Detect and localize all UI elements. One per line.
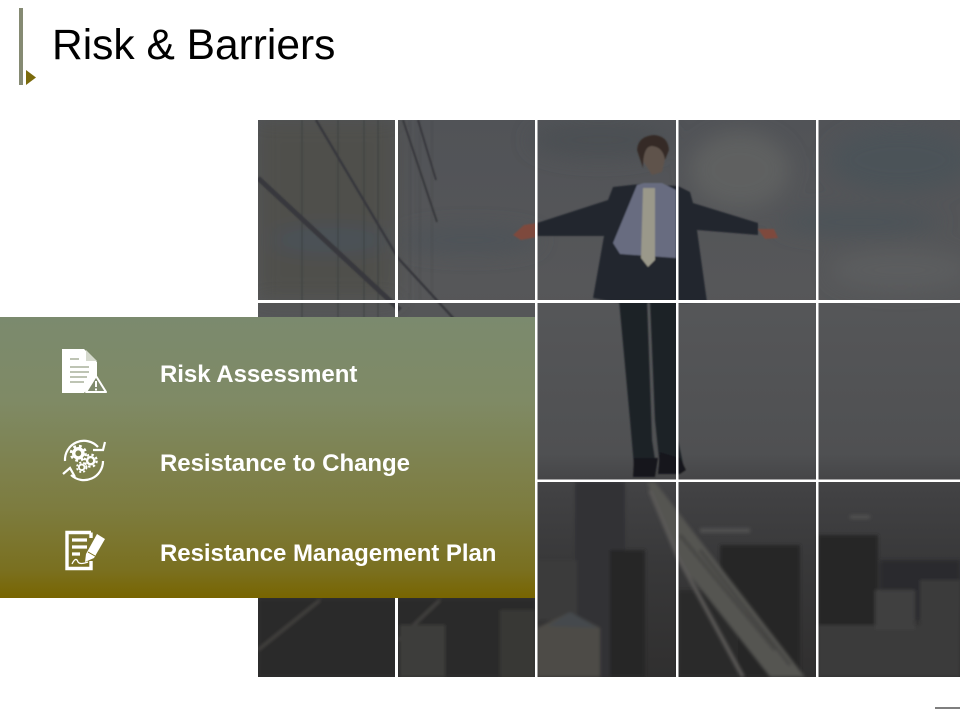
panel: risk list — [0, 317, 535, 598]
footer mark — [935, 707, 960, 709]
icon: gears with cycle arrows — [62, 440, 106, 482]
title: Risk & Barriers — [52, 22, 335, 69]
icon: document with warning — [62, 349, 107, 393]
clouds — [258, 120, 960, 300]
label: risk assessment: Risk Assessment — [160, 361, 357, 388]
label: resistance to change: Resistance to Change — [160, 450, 410, 477]
title accent bar — [19, 8, 23, 85]
man — [513, 135, 778, 477]
rope — [647, 482, 805, 677]
grid lines — [258, 120, 960, 677]
label: resistance management plan: Resistance Management Plan — [160, 540, 496, 567]
photo grid: man on tightrope — [258, 120, 960, 677]
icon: plan with pen — [65, 530, 105, 570]
building glass lines — [258, 120, 455, 320]
title accent arrow — [26, 70, 36, 85]
city skyline — [258, 482, 960, 677]
